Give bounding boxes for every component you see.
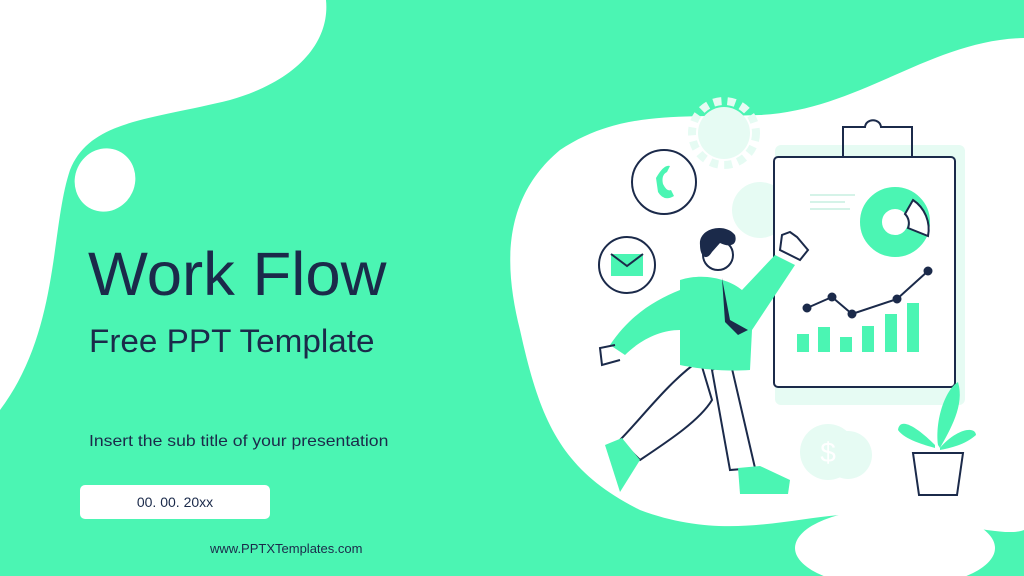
donut chart [871,198,929,246]
date box [80,485,270,519]
icon: dollar coin [800,424,872,480]
icon: dollar coin: $ [820,437,836,468]
bar chart [797,303,919,352]
website: www.PPTXTemplates.com [210,541,362,556]
plant [898,382,976,495]
icon: gear [692,101,788,238]
sub title text: Insert the sub title of your presentation [89,433,388,450]
clipboard [774,120,955,387]
icon: phone [632,150,696,214]
title: Work Flow [88,240,386,308]
date box: 00. 00. 20xx [137,494,213,510]
subtitle: Free PPT Template [89,323,374,359]
line chart [804,268,932,318]
clipboard shadow [775,145,965,405]
icon: mail [599,237,655,293]
person [600,228,808,494]
